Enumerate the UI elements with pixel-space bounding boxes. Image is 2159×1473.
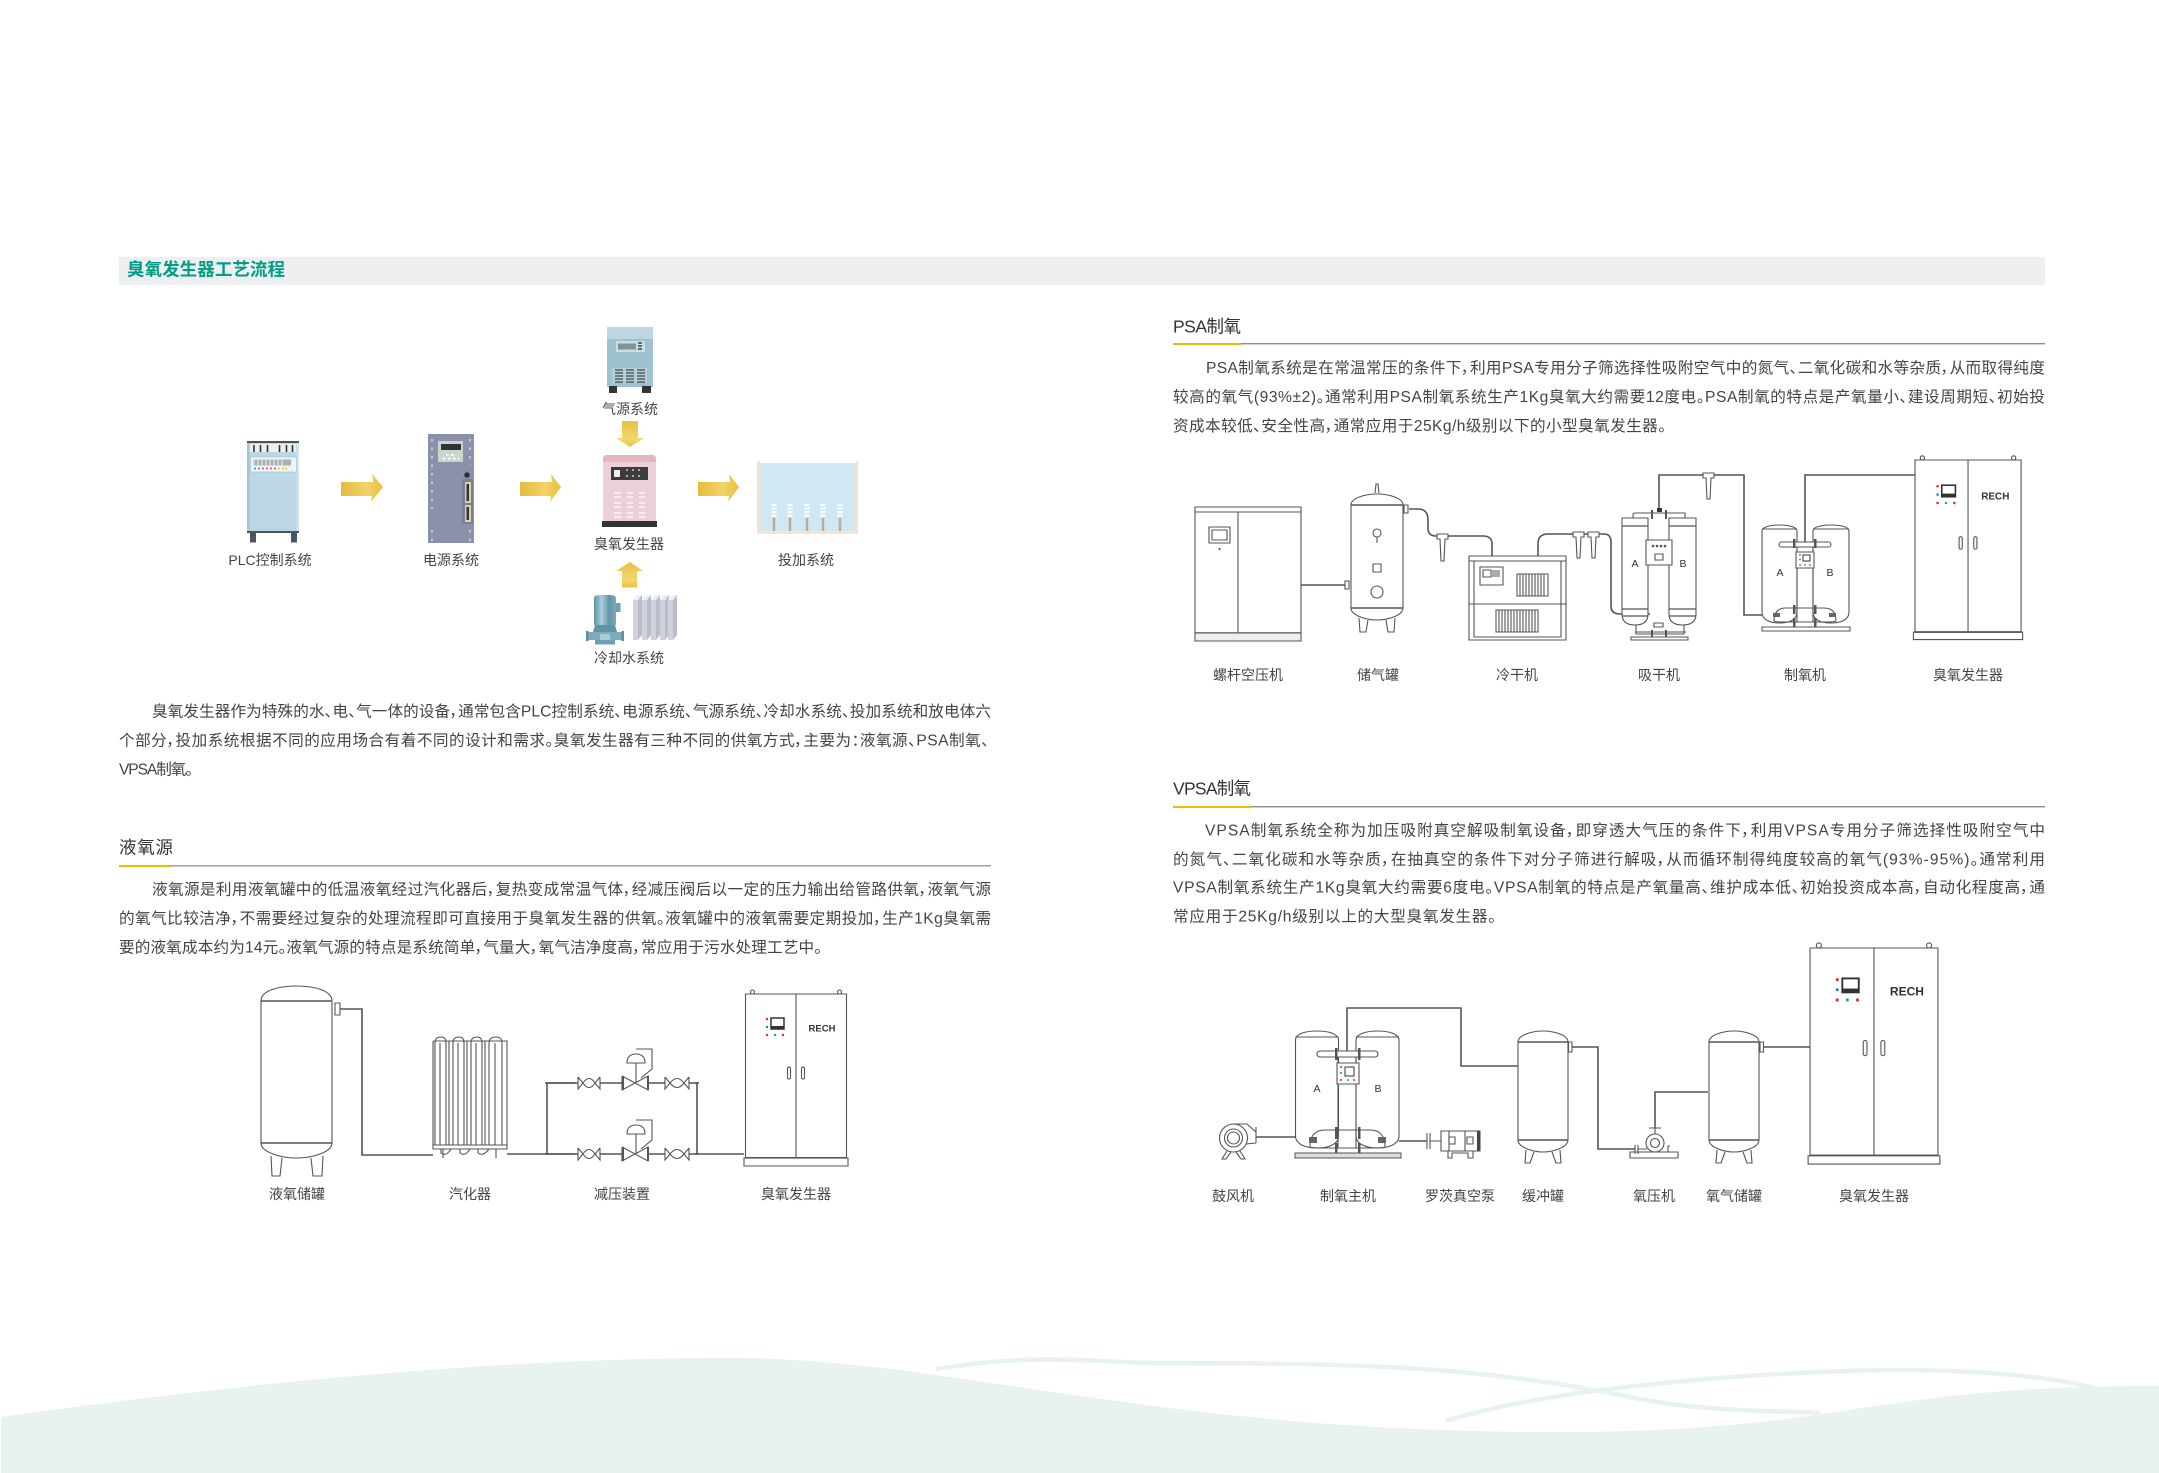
icon: ozone generator cabinet (1808, 943, 1940, 1164)
heading: VPSA制氧 (1173, 778, 1251, 798)
arrow (616, 562, 643, 588)
arrow (341, 474, 383, 502)
text block: 资成本较低、安全性高，通常应用于25Kg/h级别以下的小型臭氧发生器。 (1173, 416, 1666, 435)
pipework (340, 1009, 744, 1155)
icon: ozone generator cabinet: RECH (1890, 985, 1924, 999)
icon: oxygen host: B (1374, 1083, 1382, 1095)
icon: vaporizer (433, 1037, 507, 1158)
title: 臭氧发生器工艺流程 (127, 260, 285, 280)
text block: 常应用于25Kg/h级别以上的大型臭氧发生器。 (1173, 906, 1496, 926)
icon: power supply (428, 434, 474, 543)
background waves (1, 1358, 2159, 1473)
label: 冷干机 (1496, 667, 1538, 683)
icon: refrigerated dryer (1469, 556, 1566, 640)
label: 冷却水系统 (594, 650, 664, 666)
label: 氧气储罐 (1706, 1188, 1762, 1204)
text block (119, 880, 991, 956)
icon: filter (1703, 473, 1714, 499)
icon: pressure reducing valves (545, 1049, 699, 1161)
icon: oxygen generator: A (1776, 567, 1784, 579)
icon: ozone generator cabinet: RECH (809, 1024, 836, 1034)
label: 减压装置 (594, 1186, 650, 1202)
text block (1173, 820, 2045, 926)
icon: desiccant dryer: A (1631, 558, 1639, 570)
panel: VPSA (1173, 778, 2045, 1204)
icon: oxygen host (1295, 1031, 1401, 1158)
title band (119, 257, 2045, 285)
icon: screw air compressor (1195, 507, 1301, 641)
icon: ozone generator cabinet (744, 990, 848, 1166)
label: 电源系统 (423, 552, 479, 568)
text block: 要的液氧成本约为14元。液氧气源的特点是系统简单，气量大，氧气洁净度高，常应用于污水处理工艺中。 (119, 938, 822, 956)
label: 臭氧发生器 (1839, 1188, 1909, 1204)
label: 臭氧发生器 (1933, 667, 2003, 683)
label: 储气罐 (1357, 667, 1399, 683)
icon: oxygen host: A (1313, 1083, 1321, 1095)
text block: PSA制氧系统是在常温常压的条件下，利用PSA专用分子筛选择性吸附空气中的氮气、二氧化碳和水等杂质，从而取得纯度 (1206, 358, 2045, 377)
arrow (698, 474, 739, 502)
icon: ozone generator (602, 455, 657, 527)
label: 汽化器 (449, 1186, 491, 1202)
label: 气源系统 (602, 401, 658, 417)
text block: intro: VPSA制氧。 (119, 760, 193, 778)
icon: desiccant dryer (1622, 508, 1696, 640)
label: PLC控制系统 (228, 552, 312, 568)
pipework (1301, 475, 1915, 615)
icon: ozone generator cabinet (1913, 456, 2023, 640)
label: 缓冲罐 (1522, 1188, 1564, 1204)
icon: oxygen tank (1709, 1031, 1764, 1163)
panel: PSA (1173, 316, 2045, 683)
label: 氧压机 (1633, 1188, 1675, 1204)
label: 吸干机 (1638, 667, 1680, 683)
icon: blower (1220, 1124, 1256, 1159)
icon: dosing tank (757, 461, 858, 534)
icon: air source (607, 327, 653, 393)
icon: filter (1437, 534, 1448, 561)
icon: PLC control cabinet (247, 441, 299, 542)
icon: ozone generator cabinet: RECH (1981, 491, 2009, 502)
icon: oxygen compressor (1630, 1128, 1678, 1158)
text block: VPSA制氧系统生产1Kg臭氧大约需要6度电。VPSA制氧的特点是产氧量高、维护成本低、初始投资成本高，自动化程度高，通 (1173, 878, 2045, 896)
icon: air receiver (1345, 484, 1408, 632)
icon: oxygen generator: B (1826, 567, 1834, 579)
text block: intro: 个部分，投加系统根据不同的应用场合有着不同的设计和需求。臭氧发生器有三种不同的供氧方式，主要为：液氧源、PSA制氧、 (119, 730, 989, 750)
icon: roots vacuum pump (1427, 1131, 1480, 1158)
label: 罗茨真空泵 (1425, 1188, 1495, 1204)
text block: intro (119, 702, 991, 778)
arrow (616, 421, 644, 447)
heading: PSA制氧 (1173, 316, 1241, 336)
panel: liquid oxygen (119, 838, 991, 1202)
panel: process flow (228, 327, 858, 666)
label: 投加系统 (778, 552, 834, 568)
heading: 液氧源 (119, 838, 173, 858)
label: 制氧机 (1784, 667, 1826, 683)
text block: 的氮气、二氧化碳和水等杂质，在抽真空的条件下对分子筛进行解吸，从而循环制得纯度较高的氧气(93%-95%)。通常利用 (1173, 850, 2045, 868)
label: 液氧储罐 (269, 1186, 325, 1202)
label: 螺杆空压机 (1213, 667, 1283, 683)
text block: 较高的氧气(93%±2)。通常利用PSA制氧系统生产1Kg臭氧大约需要12度电。PSA制氧的特点是产氧量小、建设周期短、初始投 (1173, 388, 2045, 406)
icon: desiccant dryer: B (1679, 558, 1687, 570)
text block: intro: 臭氧发生器作为特殊的水、电、气一体的设备，通常包含PLC控制系统、电源系统、气源系统、冷却水系统、投加系统和放电体六 (152, 702, 991, 720)
text block: 的氧气比较洁净，不需要经过复杂的处理流程即可直接用于臭氧发生器的供氧。液氧罐中的液氧需要定期投加，生产1Kg臭氧需 (119, 910, 991, 928)
icon: pump and radiator (586, 595, 677, 644)
label: 制氧主机 (1320, 1188, 1376, 1204)
text block: VPSA制氧系统全称为加压吸附真空解吸制氧设备，即穿透大气压的条件下，利用VPSA专用分子筛选择性吸附空气中 (1205, 820, 2045, 840)
text block (1173, 358, 2045, 435)
pipework (1256, 1008, 1810, 1149)
label: 臭氧发生器 (594, 536, 664, 552)
icon: oxygen generator (1762, 525, 1850, 631)
icon: buffer tank (1518, 1031, 1572, 1163)
icon: liquid oxygen tank (261, 986, 340, 1176)
label: 臭氧发生器 (761, 1186, 831, 1202)
label: 鼓风机 (1212, 1188, 1254, 1204)
arrow (520, 474, 561, 502)
text block: 液氧源是利用液氧罐中的低温液氧经过汽化器后，复热变成常温气体，经减压阀后以一定的压力输出给管路供氧，液氧气源 (152, 880, 991, 898)
icon: twin filters (1573, 532, 1599, 558)
